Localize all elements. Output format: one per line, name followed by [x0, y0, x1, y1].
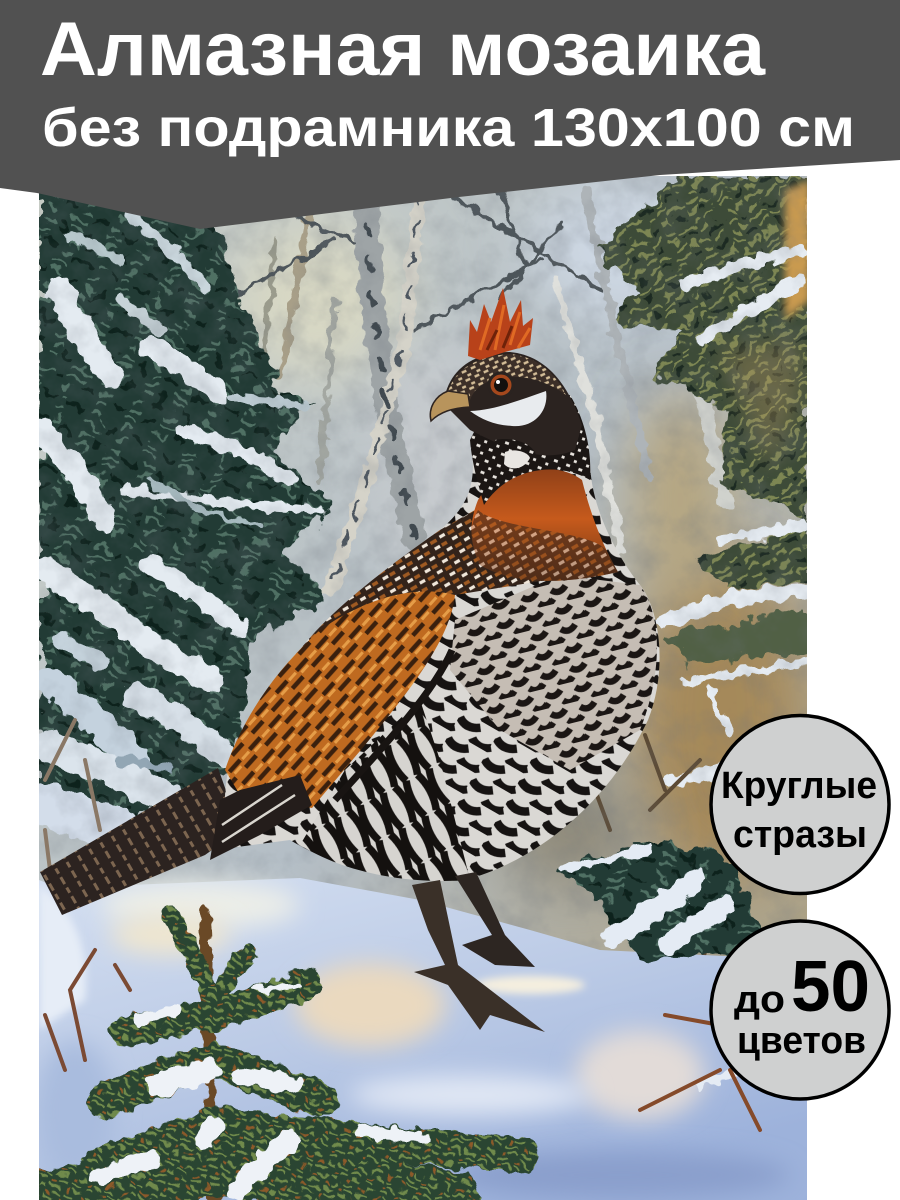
badge: round rhinestones — [711, 716, 889, 894]
primaries — [210, 775, 312, 860]
painterly tone variation — [39, 176, 807, 956]
forest background — [39, 176, 807, 956]
wing — [225, 591, 455, 808]
eye — [489, 373, 513, 397]
snow on right fir — [665, 250, 805, 782]
near leg — [412, 880, 545, 1032]
tail — [40, 768, 240, 915]
crown speckles — [448, 354, 566, 400]
snowy branches lower right — [555, 840, 765, 1130]
painting: hazel grouse in winter forest — [35, 176, 810, 1200]
badge: up to 50 colours: цветов — [737, 1020, 866, 1062]
lower flank bars — [300, 700, 470, 881]
right fir tree — [595, 176, 810, 985]
badge: up to 50 colours: до — [734, 979, 785, 1021]
throat — [495, 439, 536, 454]
badge: round rhinestones: стразы — [733, 814, 867, 856]
badge: round rhinestones: Круглые — [721, 765, 877, 807]
crest — [468, 288, 533, 360]
snow on left fir — [42, 215, 320, 835]
badge: up to 50 colours — [711, 921, 889, 1099]
head — [445, 352, 582, 455]
left fir tree — [39, 190, 335, 835]
beak — [430, 391, 470, 421]
small fir foreground — [50, 915, 520, 1200]
white cheek — [470, 391, 546, 426]
breast orange — [472, 468, 618, 581]
neck — [470, 395, 590, 505]
twigs lower left — [45, 720, 130, 1070]
mantle speckles — [300, 510, 560, 650]
wing shadow — [335, 650, 452, 800]
body — [225, 460, 660, 876]
badge: up to 50 colours: 50 — [791, 947, 870, 1027]
bird: hazel grouse — [40, 288, 660, 1032]
breast speckles — [472, 510, 618, 581]
snow on small fir — [100, 985, 420, 1190]
header banner — [0, 0, 900, 229]
birch trunks — [235, 190, 725, 590]
upper flank — [450, 575, 657, 770]
snow ground — [35, 878, 807, 1200]
far leg — [455, 872, 535, 967]
title: Алмазная мозаика — [40, 7, 766, 92]
twigs right — [596, 733, 707, 956]
subtitle: без подрамника 130х100 см — [42, 98, 855, 158]
